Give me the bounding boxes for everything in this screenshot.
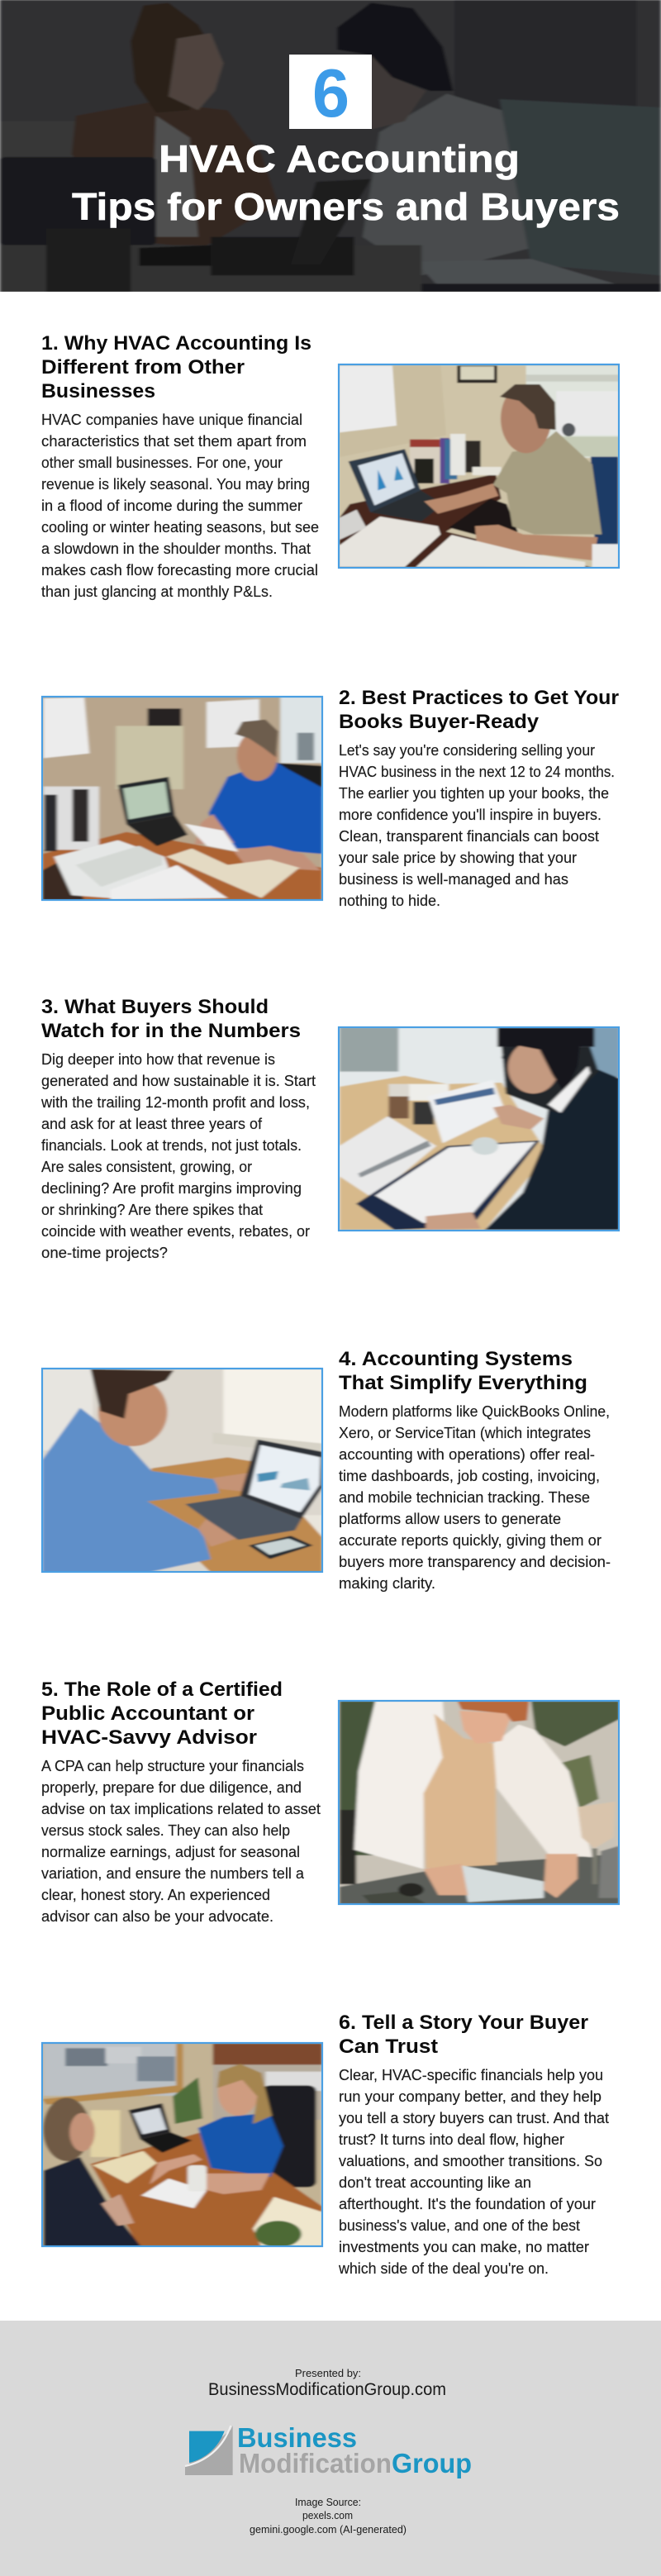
presented by: Presented by: [295,2367,361,2379]
body text 6: investments you can make, no matter [339,2239,589,2255]
heading 6: 6. Tell a Story Your Buyer [339,2012,588,2034]
body text 3: financials. Look at trends, not just totals. [41,1137,302,1154]
body text 5: advise on tax implications related to asset [41,1801,321,1817]
body text 3: and ask for at least three years of [41,1116,263,1132]
body text 4: buyers more transparency and decision- [339,1554,611,1570]
section 2 [41,687,619,909]
section 5 [41,1678,620,1925]
heading 4: That Simplify Everything [339,1372,587,1394]
body text 6: business's value, and one of the best [339,2217,580,2234]
logo: Business [237,2422,357,2453]
body text 4: accurate reports quickly, giving them or [339,1532,602,1549]
body text 2: your sale price by showing that your [339,850,577,866]
body text 4: and mobile technician tracking. These [339,1489,590,1506]
body text 3 [40,1051,316,1261]
section 6 [41,2012,609,2277]
photo: man in blue polo reviewing binders [41,696,322,900]
title: Tips for Owners and Buyers [72,185,620,228]
body text 2: business is well-managed and has [339,871,568,888]
heading 5 [41,1678,283,1749]
photo: man in suit examining financial charts [338,1026,620,1231]
section 1 [41,332,619,600]
title [72,137,620,228]
body text 1: than just glancing at monthly P&Ls. [41,583,273,600]
body text 2: more confidence you'll inspire in buyers. [339,807,602,823]
body text 5: A CPA can help structure your financials [41,1758,304,1774]
body text 6: run your company better, and they help [339,2088,602,2105]
body text 6: don't treat accounting like an [339,2174,531,2191]
section 4 [41,1348,611,1592]
body text 6: valuations, and smoother transitions. So [339,2153,602,2169]
heading 1: Businesses [41,380,155,402]
body text 1: other small businesses. For one, your [41,455,283,471]
presented by [208,2367,446,2399]
body text 3: one-time projects? [41,1245,168,1261]
heading 5: Public Accountant or [41,1702,254,1725]
body text 3: coincide with weather events, rebates, or [41,1223,310,1240]
body text 5: properly, prepare for due diligence, and [41,1779,302,1796]
heading 4: 4. Accounting Systems [339,1348,573,1370]
photo: two women talking across office desk [41,2042,322,2247]
logo: Modification [239,2448,392,2478]
heading 6: Can Trust [339,2036,438,2058]
footer panel [0,2321,661,2576]
heading 6 [339,2012,588,2058]
body text 1: a slowdown in the shoulder months. That [41,540,311,557]
body text 1: characteristics that set them apart from [41,433,307,450]
heading 3: 3. What Buyers Should [41,996,269,1018]
image source: Image Source: [295,2497,361,2508]
body text 6: trust? It turns into deal flow, higher [339,2131,564,2148]
body text 6 [338,2067,609,2277]
heading 4 [339,1348,587,1394]
photo: man at desk with laptop and seasonal calendar [339,364,619,569]
body text 5: clear, honest story. An experienced [41,1887,270,1903]
heading 5: 5. The Role of a Certified [41,1678,283,1701]
heading 1: 1. Why HVAC Accounting Is [41,332,311,355]
logo: Group [392,2448,472,2478]
body text 1: cooling or winter heating seasons, but see [41,519,319,536]
heading 5: HVAC-Savvy Advisor [41,1726,257,1749]
body text 1: makes cash flow forecasting more crucial [41,562,318,579]
body text 2: The earlier you tighten up your books, the [339,785,609,802]
number badge [289,55,372,131]
header banner [0,0,661,292]
body text 3: or shrinking? Are there spikes that [41,1202,263,1218]
body text 6: Clear, HVAC-specific financials help you [339,2067,603,2083]
body text 1: in a flood of income during the summer [41,498,302,514]
body text 5: normalize earnings, adjust for seasonal [41,1844,300,1860]
heading 2: Books Buyer-Ready [339,711,540,733]
body text 2 [339,742,615,909]
body text 1 [41,412,319,600]
hero photo with dark overlay [0,0,661,292]
photo: man pointing at laptop dashboard [41,1368,322,1573]
body text 5 [41,1758,321,1925]
body text 4: accounting with operations) offer real- [339,1446,595,1463]
number badge: 6 [312,55,350,131]
image source: pexels.com [302,2510,353,2521]
body text 3: generated and how sustainable it is. Start [41,1073,316,1089]
body text 4 [339,1403,611,1592]
body text 2: Let's say you're considering selling your [339,742,595,759]
body text 4: time dashboards, job costing, invoicing, [339,1468,600,1484]
body text 6: you tell a story buyers can trust. And that [339,2110,609,2126]
logo icon [185,2426,233,2475]
body text 4: Xero, or ServiceTitan (which integrates [339,1425,591,1441]
body text 2: HVAC business in the next 12 to 24 months. [339,764,615,780]
section 3 [40,996,620,1261]
body text 5: versus stock sales. They can also help [41,1822,290,1839]
body text 2: Clean, transparent financials can boost [339,828,599,845]
image source: gemini.google.com (AI-generated) [250,2524,407,2536]
body text 3: declining? Are profit margins improving [41,1180,302,1197]
body text 3: Dig deeper into how that revenue is [41,1051,275,1068]
body text 4: making clarity. [339,1575,435,1592]
body text 5: variation, and ensure the numbers tell a [41,1865,305,1882]
photo: woman in white shirt writing on papers [338,1700,620,1904]
body text 3: with the trailing 12-month profit and loss, [40,1094,310,1111]
heading 1: Different from Other [41,356,245,379]
image source [250,2497,407,2536]
heading 1 [41,332,311,402]
heading 3 [41,996,301,1042]
body text 6: which side of the deal you're on. [338,2260,549,2277]
title: HVAC Accounting [159,137,520,180]
body text 3: Are sales consistent, growing, or [41,1159,252,1175]
heading 2: 2. Best Practices to Get Your [339,687,619,709]
body text 5: advisor can also be your advocate. [41,1908,273,1925]
logo [185,2422,472,2478]
body text 4: Modern platforms like QuickBooks Online, [339,1403,610,1420]
body text 6: afterthought. It's the foundation of your [339,2196,596,2212]
body text 1: revenue is likely seasonal. You may bring [41,476,310,493]
body text 2: nothing to hide. [339,893,440,909]
heading 2 [339,687,619,733]
body text 4: platforms allow users to generate [339,1511,561,1527]
heading 3: Watch for in the Numbers [41,1020,301,1042]
body text 1: HVAC companies have unique financial [41,412,302,428]
presented by: BusinessModificationGroup.com [208,2380,446,2399]
